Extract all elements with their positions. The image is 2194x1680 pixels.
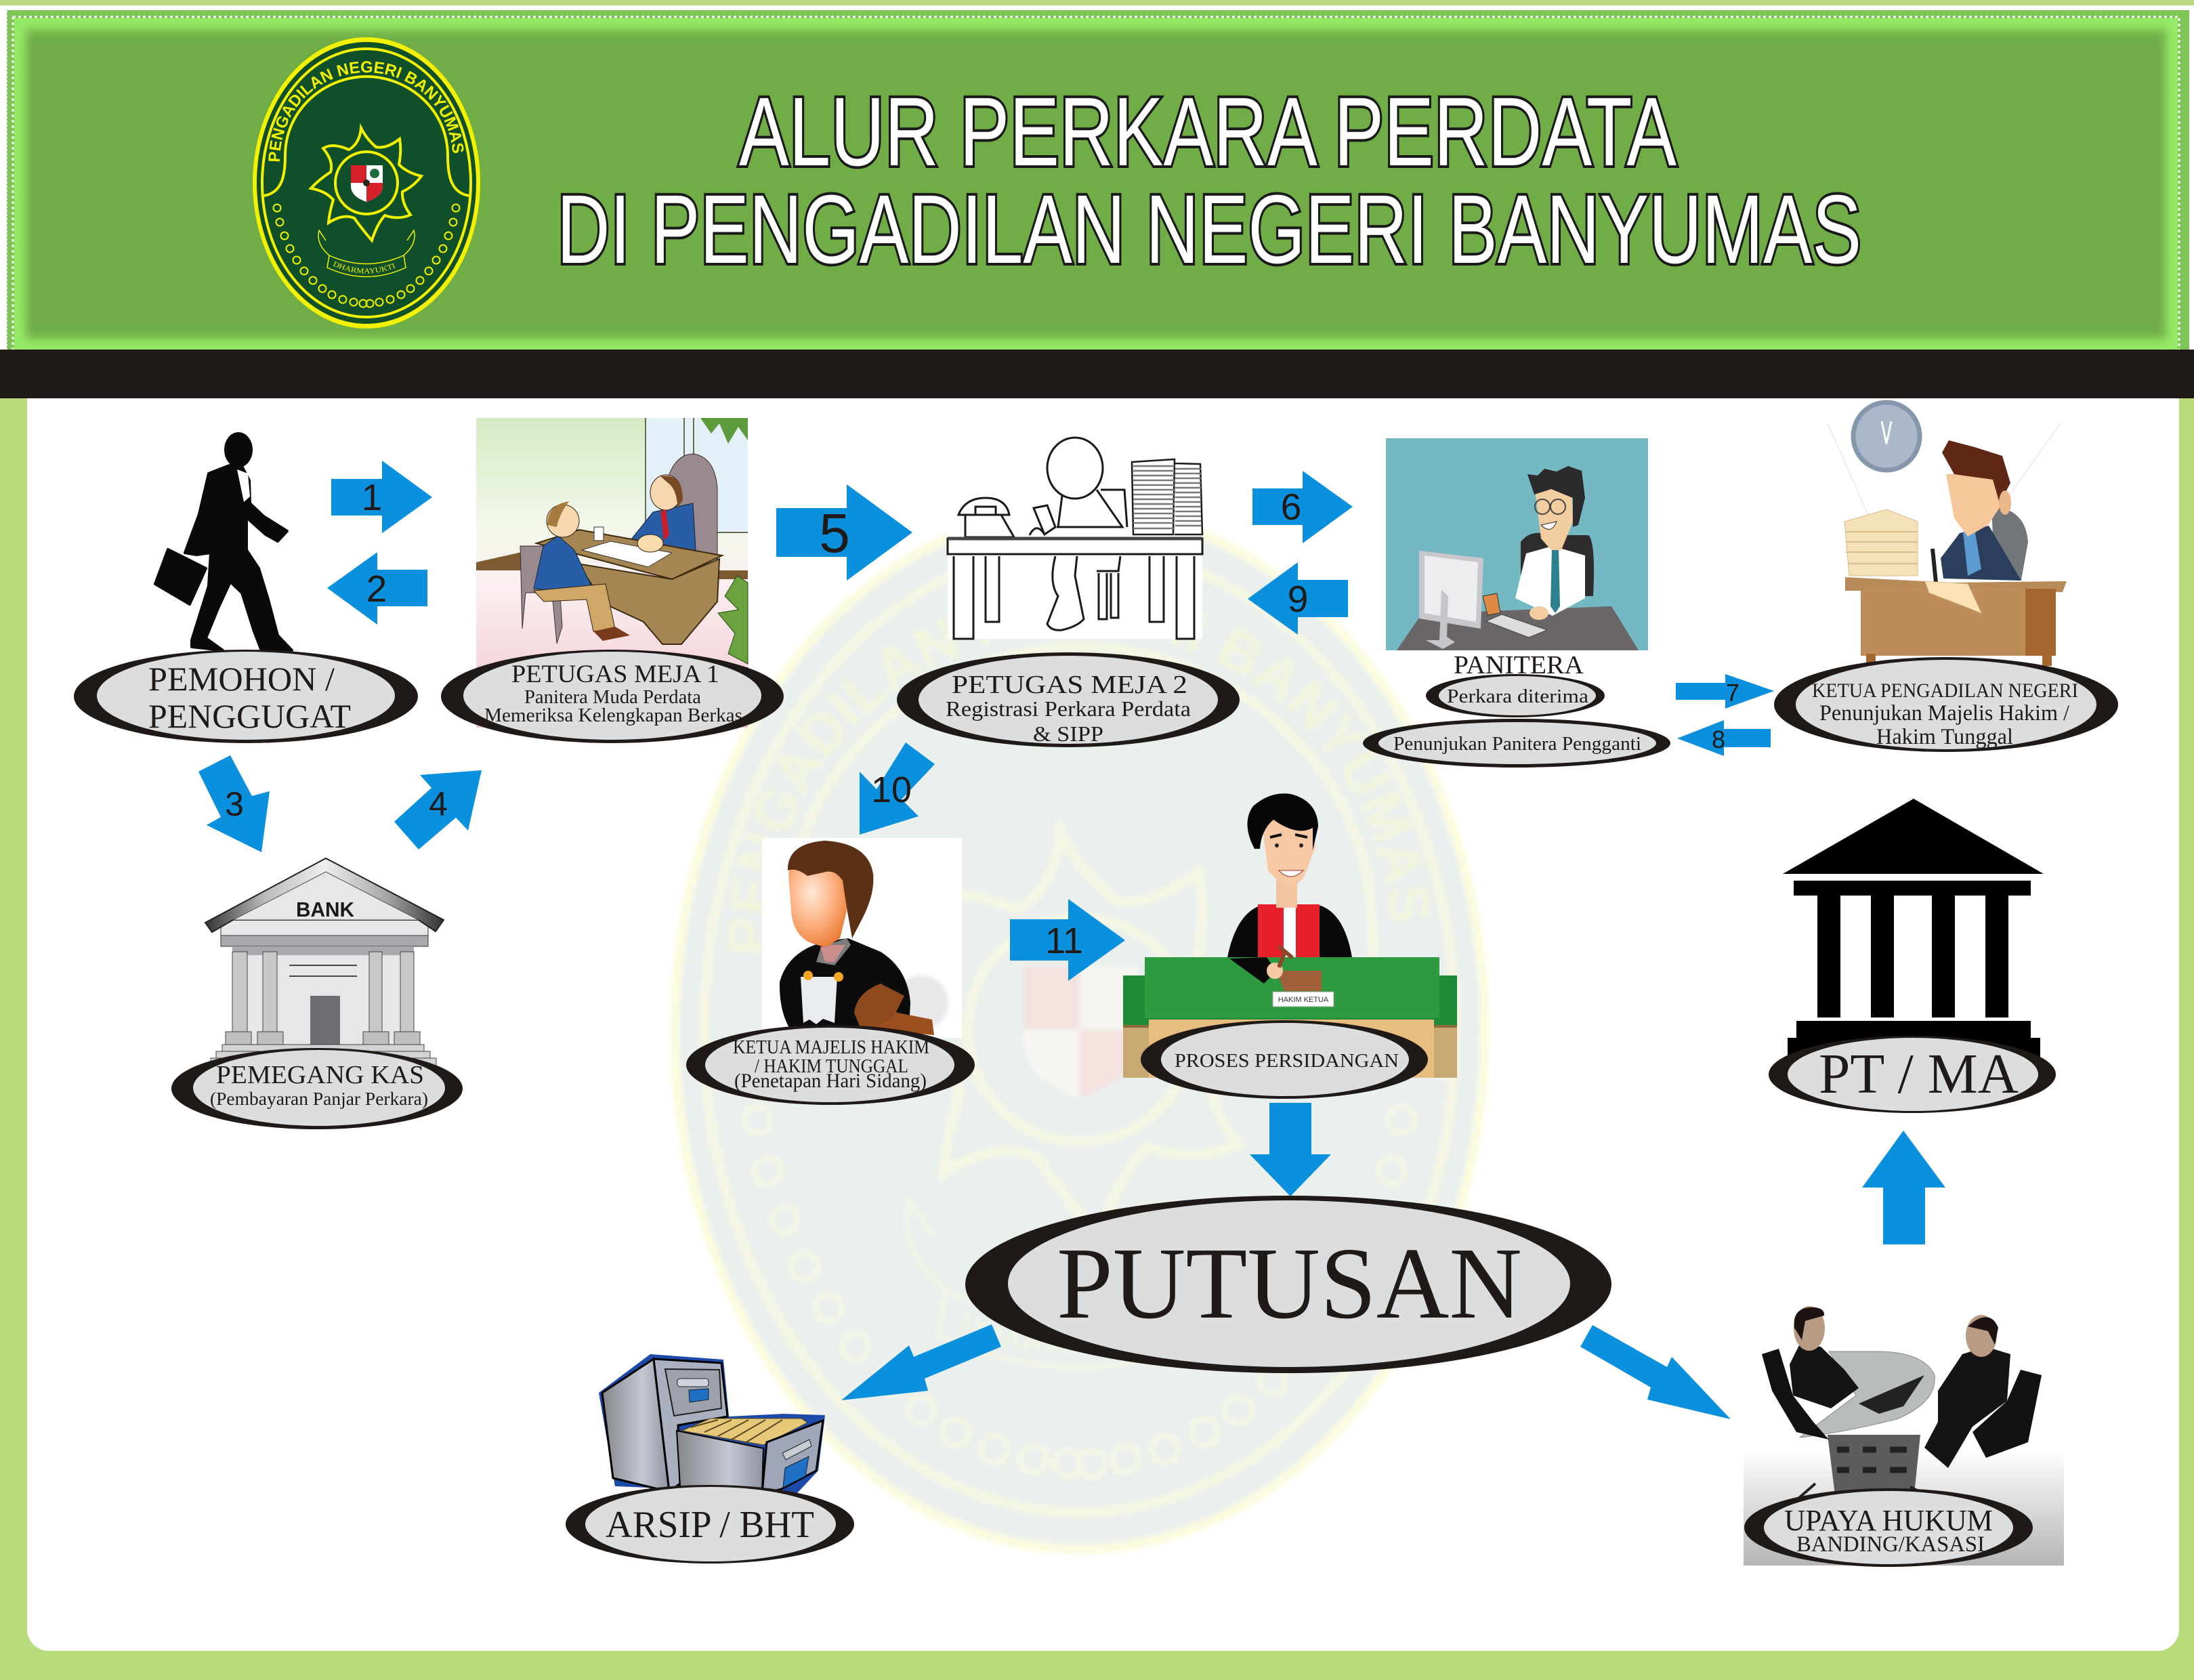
label: UPAYA HUKUM: [1744, 1488, 2033, 1567]
label: Penunjukan Panitera Pengganti: Penunjukan Panitera Pengganti: [1393, 733, 1641, 755]
label: PANITERA: PANITERA: [1454, 651, 1584, 679]
label: KETUA MAJELIS HAKIM: (Penetapan Hari Sidang): [734, 1070, 927, 1092]
arrow: upaya hukum to PT / MA: [1862, 1131, 1945, 1244]
watermark: court emblem: DHARMAYUKTI: [963, 1315, 1066, 1353]
arrow 4: 4: [429, 785, 448, 823]
title: [557, 77, 1861, 284]
illustration: judge with gavel: [762, 838, 962, 1038]
arrow 3: [198, 755, 270, 852]
arrow 1: [331, 461, 432, 533]
label: PETUGAS MEJA 1: [441, 650, 784, 743]
arrow 9: [1248, 562, 1348, 635]
arrow 4: [394, 770, 482, 849]
black band under header: [0, 350, 2194, 398]
label: KETUA MAJELIS HAKIM: KETUA MAJELIS HAKIM: [733, 1037, 929, 1058]
illustration: Panitera at computer: [1386, 438, 1648, 650]
arrow 9: 9: [1288, 578, 1308, 620]
label: PT / MA: PT / MA: [1819, 1043, 2019, 1106]
arrow: putusan to arsip: [841, 1324, 1001, 1400]
arrow 5: [776, 484, 912, 581]
label: KETUA PENGADILAN NEGERI: Hakim Tunggal: [1876, 725, 2013, 749]
label: UPAYA HUKUM: UPAYA HUKUM: [1784, 1504, 1993, 1537]
arrow 11: [1010, 899, 1125, 981]
label: KETUA PENGADILAN NEGERI: Penunjukan Majelis Hakim /: [1819, 701, 2070, 726]
label: Penunjukan Panitera Pengganti: [1363, 719, 1670, 768]
illustration: Ketua Pengadilan at desk: [1820, 400, 2067, 666]
label: PETUGAS MEJA 2: [897, 652, 1240, 747]
arrow 3: 3: [225, 785, 244, 823]
label: PEMOHON / PENGGUGAT: PEMOHON /: [148, 660, 335, 698]
emblem: Pengadilan Negeri Banyumas: PENGADILAN NEGERI BANYUMAS: [268, 61, 463, 161]
arrow 10: 10: [871, 770, 912, 810]
label: PROSES PERSIDANGAN: [1141, 1020, 1428, 1099]
label: PUTUSAN: [965, 1196, 1611, 1373]
label: KETUA MAJELIS HAKIM: / HAKIM TUNGGAL: [755, 1056, 908, 1077]
label: ARSIP / BHT: ARSIP / BHT: [606, 1504, 814, 1546]
illustration: Petugas Meja 1 office: [476, 418, 748, 728]
icon: bank building: [205, 858, 444, 1066]
label: PEMEGANG KAS: (Pembayaran Panjar Perkara): [210, 1089, 428, 1109]
label: PEMEGANG KAS: PEMEGANG KAS: [216, 1061, 424, 1089]
label: UPAYA HUKUM: BANDING/KASASI: [1796, 1532, 1985, 1557]
illustration: Petugas Meja 2 line drawing: [948, 438, 1202, 639]
arrow 7: [1676, 674, 1774, 709]
panel: main white content area: [27, 366, 2179, 1651]
icon: walking applicant silhouette: [155, 434, 292, 650]
label: PETUGAS MEJA 1: Panitera Muda Perdata: [524, 686, 701, 708]
label: Perkara diterima: Perkara diterima: [1447, 686, 1588, 707]
arrow 5: 5: [819, 503, 850, 564]
arrow: persidangan to putusan: [1250, 1103, 1331, 1196]
arrow 1: 1: [362, 476, 382, 518]
label: PETUGAS MEJA 1: PETUGAS MEJA 1: [511, 660, 719, 688]
emblem: Pengadilan Negeri Banyumas: DHARMAYUKTI: [333, 261, 396, 274]
arrow 6: 6: [1281, 486, 1301, 528]
label: PETUGAS MEJA 2: & SIPP: [1033, 721, 1103, 746]
arrow 2: [327, 552, 427, 625]
watermark: court emblem: PENGADILAN NEGERI BANYUMAS: [727, 614, 1429, 952]
label: PETUGAS MEJA 2: Registrasi Perkara Perdata: [946, 696, 1191, 721]
label: KETUA MAJELIS HAKIM: [686, 1025, 975, 1105]
watermark: court emblem: [669, 528, 1491, 1555]
icon: filing cabinet: [599, 1354, 825, 1494]
arrow 8: [1677, 720, 1771, 756]
label: PEMOHON / PENGGUGAT: PENGGUGAT: [148, 697, 351, 735]
label: ARSIP / BHT: [566, 1485, 854, 1563]
header banner: [0, 0, 2194, 351]
arrow 2: 2: [366, 568, 387, 610]
illustration: presiding judge at bench: HAKIM KETUA: [1278, 996, 1329, 1004]
emblem: Pengadilan Negeri Banyumas: [253, 37, 480, 329]
arrow 10: [860, 742, 935, 835]
icon: bank building: BANK: [296, 898, 355, 921]
label: PETUGAS MEJA 1: Memeriksa Kelengkapan Berkas: [484, 705, 742, 726]
label: PUTUSAN: PUTUSAN: [1057, 1226, 1522, 1340]
arrow 7: 7: [1726, 679, 1739, 707]
label: KETUA PENGADILAN NEGERI: KETUA PENGADILAN NEGERI: [1812, 679, 2078, 702]
arrow 8: 8: [1712, 726, 1725, 753]
label: PEMOHON / PENGGUGAT: [74, 650, 418, 743]
illustration: two lawyers at a meeting table: [1744, 1276, 2064, 1566]
label: PEMEGANG KAS: [171, 1048, 463, 1129]
label: PT / MA: [1769, 1036, 2056, 1113]
arrow 6: [1252, 471, 1353, 543]
arrow 11: 11: [1045, 921, 1083, 961]
icon: high court building: [1783, 799, 2044, 1058]
label: Perkara diterima: [1426, 674, 1605, 717]
label: KETUA PENGADILAN NEGERI: [1774, 657, 2118, 752]
arrow: putusan to upaya hukum: [1580, 1325, 1731, 1419]
label: PETUGAS MEJA 2: PETUGAS MEJA 2: [952, 671, 1187, 699]
title: ALUR PERKARA PERDATA: [739, 77, 1676, 186]
label: PROSES PERSIDANGAN: PROSES PERSIDANGAN: [1175, 1050, 1399, 1072]
illustration: presiding judge at bench: [1123, 793, 1457, 1078]
